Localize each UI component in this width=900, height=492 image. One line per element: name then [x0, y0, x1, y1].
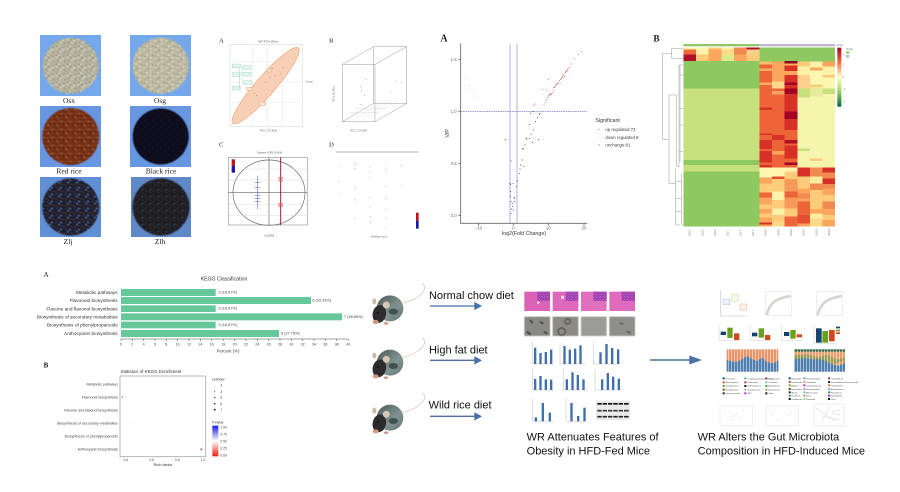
axis tick labels: 0.0: [451, 213, 457, 218]
x axis: 12: [187, 343, 191, 347]
label: Osg: Osg: [154, 96, 166, 105]
x axis: 8: [165, 343, 167, 347]
axis tick labels: 1.5: [451, 57, 457, 62]
legend: genus: Akkermansia: [806, 391, 818, 394]
category labels: Flavone and flavonol biosynthesis: [46, 306, 118, 312]
dendrogram: [662, 48, 683, 225]
x axis: 18: [221, 343, 225, 347]
caption: WR Alters the Gut Microbiota: [698, 431, 840, 443]
panel: obesity features: [524, 292, 659, 457]
heading: A: A: [440, 34, 448, 45]
column labels: OSX-2: [778, 228, 780, 236]
stacked bar chart: phylum: [727, 349, 778, 372]
legend: phylum: Chloroflexi: [768, 381, 778, 384]
electron micrographs: [524, 317, 635, 336]
legend: genus: Mucispirillum: [831, 395, 842, 398]
value labels: 5 (27.78%): [281, 331, 300, 335]
OPLS-DA score plot: [228, 151, 307, 237]
label: Osx: Osx: [63, 96, 75, 105]
axis tick labels: −10: [475, 226, 483, 231]
colour scale legend: [837, 44, 854, 107]
bar charts row 3: [533, 399, 586, 421]
legend: phylum: Tenericutes: [747, 381, 757, 384]
value labels: [218, 290, 363, 335]
heading: A: A: [219, 38, 224, 45]
colour scale legend: −2: [842, 101, 846, 103]
panel: mouse diet groups: [371, 283, 514, 434]
p-value legend: 0.50: [220, 440, 227, 444]
label: wild rice diet: Wild rice diet: [429, 399, 492, 411]
panel: multivariate plots: [219, 38, 419, 238]
x axis: 2: [131, 343, 133, 347]
column 9: [785, 61, 797, 227]
legend: phylum: Acidobacteria: [768, 385, 781, 388]
category labels: Anthocyanin biosynthesis: [64, 331, 118, 337]
category labels: [37, 290, 118, 337]
colour scale legend: Group: [837, 44, 844, 47]
x axis: 4: [143, 343, 145, 347]
column labels: [690, 228, 831, 236]
legend: genus: Dorea: [806, 395, 812, 398]
x axis: 40: [346, 343, 350, 347]
3D scatter plot: [331, 47, 407, 133]
number legend: 3: [220, 384, 222, 388]
ordination plots: [720, 404, 844, 426]
column 7: [759, 62, 772, 227]
photo: Zlj: [40, 177, 101, 237]
icon: mouse 1: [371, 283, 425, 325]
photo: Black rice: [130, 106, 191, 167]
column 11: [810, 62, 823, 227]
bubble plot: Rich factor: [153, 462, 173, 467]
legend: unchange:81: [605, 143, 631, 148]
caption: Composition in HFD-Induced Mice: [698, 445, 865, 457]
heading: B: B: [653, 35, 660, 45]
legend: genus: Prevotella: [806, 398, 816, 401]
p-value legend: 0.00: [220, 454, 227, 458]
legend: genus: Saccharimonas: [806, 388, 820, 391]
value labels: 6 (33.33%): [312, 299, 332, 303]
axis tick labels: [451, 57, 587, 231]
axis titles: log2(Fold Change): [502, 231, 546, 237]
column labels: ZLH-2: [702, 228, 704, 236]
permutation dot plot: Similarity (y,y): [370, 234, 387, 238]
box plot: [721, 290, 747, 316]
legend: genus: Blautia: [791, 391, 798, 394]
column labels: OSG-3: [829, 228, 831, 236]
legend: genus: Bacteroides: [791, 388, 802, 391]
x axis: 36: [323, 343, 327, 347]
arrow: normal chow diet: [430, 303, 481, 309]
legend: genus: [789, 377, 858, 401]
axis tick labels: 0.5: [451, 161, 457, 166]
up-regulated points: [534, 52, 581, 105]
3D scatter plot: PC3 (5.3%): [331, 86, 335, 102]
bubble plot: Metabolic pathways: [87, 382, 118, 386]
bubble plot: [57, 376, 206, 467]
PCA plot: Group: [306, 79, 314, 83]
axis titles: [445, 129, 546, 237]
bubble plot: Biosynthesis of phenylpropanoids: [65, 435, 118, 439]
label: Red rice: Red rice: [56, 166, 82, 176]
legend: genus: Flavonifractor: [831, 384, 843, 387]
histology images: [524, 292, 635, 311]
legend: phylum: Deferribacteres: [747, 385, 761, 388]
legend: genus: Anaerotruncus: [831, 388, 844, 391]
legend: phylum: Firmicutes: [726, 377, 735, 380]
bubble plot: Flavone and flavonol biosynthesis: [64, 408, 118, 412]
legend: phylum: TM7: [747, 393, 751, 395]
chart title: KEGG Classification: [201, 277, 247, 283]
x axis: 24: [255, 343, 259, 347]
number legend: number: [212, 377, 226, 381]
PCA plot: PC1 (73.9%): [260, 129, 277, 133]
x axis: 34: [312, 343, 316, 347]
photo: Red rice: [40, 106, 101, 167]
column 8: [772, 62, 785, 227]
x axis: 30: [289, 343, 293, 347]
colour scale legend: 0: [842, 77, 844, 79]
x axis: Percent (%): [217, 349, 240, 354]
caption: WR Attenuates Features of: [527, 431, 659, 443]
x axis: 16: [210, 343, 214, 347]
top-left block: [683, 47, 759, 61]
legend: genus: Barnesiella: [791, 377, 802, 380]
legend: phylum: Candidatus Saccharibacteria: [747, 377, 774, 380]
column labels: ZLH-3: [715, 228, 717, 236]
permutation dot plot: [336, 152, 419, 238]
label: normal chow diet: Normal chow diet: [429, 290, 514, 302]
bubble plot: 0.4: [124, 458, 128, 462]
photo: Osx: [40, 35, 101, 96]
heatmap cells: [683, 47, 835, 227]
chart title: Statistics of KEGG Enrichment: [120, 369, 182, 374]
x axis: 14: [198, 343, 202, 347]
western blot: [596, 401, 630, 420]
panel: KEGG enrichment: [44, 361, 227, 467]
category labels: Flavonoid biosynthesis: [70, 298, 118, 304]
legend: phylum: Other: [768, 392, 774, 395]
number legend: 4: [220, 390, 222, 394]
legend: genus: Helicobacter: [831, 391, 842, 394]
icon: mouse 2: [371, 338, 425, 379]
unchanged points: [505, 112, 540, 213]
PCA plot: [226, 39, 314, 133]
label: high fat diet: High fat diet: [429, 344, 488, 356]
x axis: 38: [335, 343, 339, 347]
p-value legend: 1.00: [220, 426, 227, 430]
x axis: 22: [244, 343, 248, 347]
panel: heatmap: [653, 35, 854, 236]
legend: up regulated:72: [605, 127, 636, 132]
bar charts row 1: [533, 342, 620, 364]
column labels: OSG-2: [816, 228, 818, 236]
heading: C: C: [219, 141, 224, 148]
axis titles: VIP: [445, 129, 451, 138]
number legend: 6: [220, 402, 222, 406]
x axis: 0: [120, 343, 122, 347]
legend: genus: Clostridium XI: [831, 377, 843, 380]
legend: genus: Clostridium: [806, 381, 816, 384]
heading: A: A: [44, 271, 49, 279]
legend: genus: Lachnospiraceae: [806, 384, 822, 387]
panel: rice photographs: [40, 35, 191, 246]
column labels: ZLJ-2: [740, 229, 742, 236]
photo: Zlh: [131, 177, 191, 237]
group bar: [683, 44, 835, 46]
arrow: from diet to results: [650, 356, 700, 364]
column labels: OSX-1: [766, 228, 768, 236]
column labels: OSX-3: [791, 228, 793, 236]
heading: B: B: [44, 361, 49, 369]
column labels: OSG-1: [804, 228, 806, 236]
diversity box plots: [719, 325, 840, 343]
column labels: ZLJ-1: [728, 229, 730, 236]
legend: phylum: [723, 377, 781, 395]
axis tick labels: 20: [582, 226, 587, 231]
arrow: wild rice diet: [430, 413, 481, 419]
p-value legend: 0.75: [220, 433, 227, 437]
colour scale legend: −1: [842, 89, 846, 91]
column 10: [797, 62, 810, 227]
number legend: 5: [220, 396, 222, 400]
legend: down regulated:8: [605, 135, 639, 140]
p-value legend: 0.25: [220, 447, 227, 451]
down-regulated points: [466, 79, 476, 98]
axis tick labels: 1.0: [451, 109, 457, 114]
legend: genus: Alistipes: [791, 384, 799, 387]
caption: Obesity in HFD-Fed Mice: [527, 445, 650, 457]
bubble plot: Flavonoid biosynthesis: [82, 395, 118, 399]
column labels: ZLH-1: [690, 228, 692, 236]
OPLS-DA score plot: Scores (OPLS-DA): [257, 151, 282, 155]
p-value legend: Pvalue: [212, 421, 224, 425]
heading: D: D: [329, 141, 334, 148]
legend: genus: Lactobacillus: [791, 381, 803, 384]
PCA plot: WT-PCA (Plot): [258, 39, 278, 43]
legend: genus: Saccharibacteria incertae sedis: [831, 381, 858, 384]
panel: volcano plot: [440, 34, 639, 237]
legend: genus: Parabacteroides: [806, 377, 820, 380]
category labels: Biosynthesis of phenylpropanoids: [47, 323, 118, 329]
legend: genus: Other: [831, 398, 836, 401]
bubble plot: 0.6: [149, 458, 154, 462]
value labels: 7 (38.89%): [344, 315, 363, 319]
axis tick labels: 0: [512, 226, 515, 231]
bubble plot: Biosynthesis of secondary metabolites: [57, 421, 118, 425]
number legend: [212, 377, 226, 412]
axis tick labels: 10: [546, 226, 551, 231]
bubble plot: 0.8: [175, 458, 180, 462]
legend: phylum: Spirochaetes: [768, 388, 780, 391]
heading: B: B: [329, 38, 334, 45]
panel: gut microbiota: [698, 290, 865, 457]
label: Zlh: Zlh: [155, 237, 165, 246]
legend: genus: Roseburia: [791, 395, 801, 398]
legend: Significant: [595, 118, 620, 124]
legend: phylum: Cyanobacteria: [747, 388, 761, 391]
value labels: 3 (16.67%): [218, 307, 238, 311]
value labels: 3 (16.67%): [218, 323, 238, 327]
rarefaction curves: [766, 292, 843, 316]
bars: [121, 289, 342, 337]
colour scale legend: Group: [846, 48, 854, 51]
legend: phylum: Bacteroidetes: [726, 381, 738, 384]
label: Zlj: Zlj: [64, 237, 72, 246]
icon: mouse 3: [371, 393, 425, 434]
x axis: 26: [267, 343, 271, 347]
panel: KEGG classification: [37, 271, 363, 354]
x axis: 32: [301, 343, 305, 347]
OPLS-DA score plot: t1 [28%]: [264, 233, 274, 237]
threshold lines: [461, 44, 587, 223]
legend: phylum: Fusobacteria: [768, 377, 781, 380]
category labels: Biosynthesis of secondary metabolites: [37, 314, 118, 320]
value labels: 3 (16.67%): [218, 290, 238, 294]
x axis: 10: [176, 343, 180, 347]
3D scatter plot: PC1 (73.9%): [350, 129, 367, 133]
bar charts row 2: [533, 369, 622, 390]
bubble plot: Anthocyanin biosynthesis: [78, 448, 118, 452]
colour scale legend: 2: [842, 54, 844, 56]
x axis: 28: [278, 343, 282, 347]
number legend: 7: [220, 408, 222, 412]
label: Black rice: Black rice: [146, 166, 177, 176]
legend: phylum: Actinobacteria: [726, 388, 739, 391]
legend: genus: Oscillibacter: [791, 398, 802, 401]
legend: phylum: Verrucomicrobia: [726, 392, 741, 395]
x axis: 20: [233, 343, 237, 347]
x axis: [120, 339, 350, 354]
x axis: 6: [154, 343, 156, 347]
colour scale legend: 1: [842, 65, 844, 67]
legend: [595, 118, 639, 148]
arrow: high fat diet: [430, 357, 481, 363]
column 12: [823, 62, 835, 227]
legend: phylum: Proteobacteria: [726, 385, 739, 388]
category labels: Metabolic pathways: [76, 290, 118, 296]
stacked bar chart: genus: [794, 349, 845, 372]
bubble plot: 1.0: [201, 458, 205, 462]
axes: [458, 43, 587, 226]
photo: Osg: [130, 35, 191, 96]
p-value legend: [212, 421, 227, 458]
column labels: ZLJ-3: [753, 229, 755, 236]
